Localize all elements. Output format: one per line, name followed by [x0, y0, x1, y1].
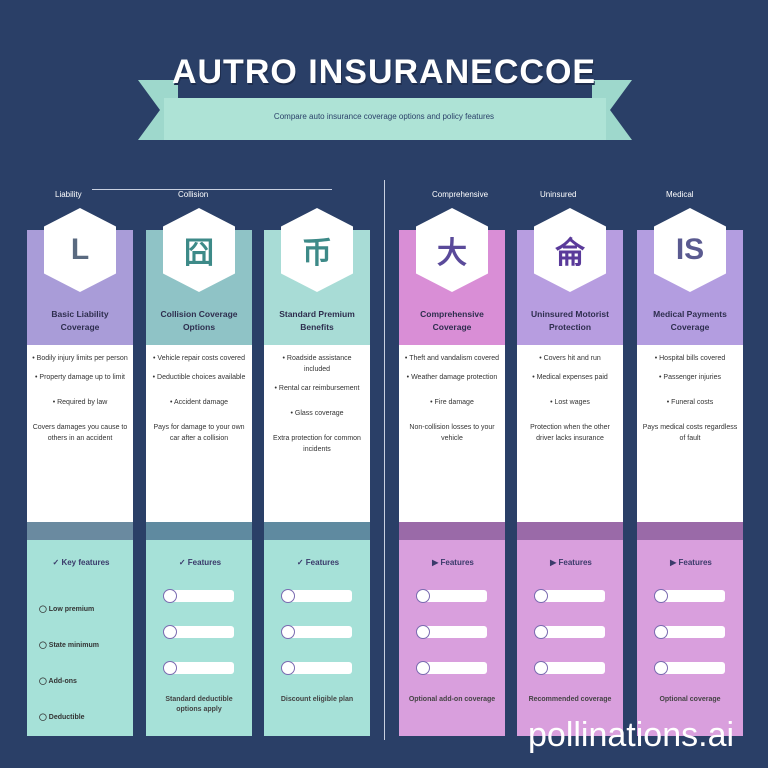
section labels — [55, 189, 694, 199]
section labels: Comprehensive — [432, 190, 488, 199]
section labels: Medical — [666, 190, 694, 199]
column 4: • Theft and vandalism covered — [405, 355, 499, 362]
column 2: • Accident damage — [170, 399, 228, 406]
column 5 — [517, 208, 623, 736]
icon 1 — [44, 208, 116, 292]
column 5: ▶ Features — [550, 558, 592, 567]
column 2: ✓ Features — [179, 558, 221, 567]
icon 4 — [416, 208, 488, 292]
icon 2 — [163, 208, 235, 292]
icon 3: 币 — [302, 237, 332, 270]
column 4: Coverage — [433, 322, 471, 332]
column 1: Basic Liability — [51, 309, 109, 319]
column 4: ▶ Features — [432, 558, 474, 567]
icon 4: 大 — [437, 237, 467, 270]
column 2: • Deductible choices available — [153, 374, 245, 381]
column 1 — [27, 208, 133, 736]
column 4: Comprehensive — [420, 309, 484, 319]
column 5: Protection — [549, 322, 591, 332]
section labels: Uninsured — [540, 190, 576, 199]
column 3: Discount eligible plan — [281, 696, 353, 703]
column 4: Non-collision losses to your vehicle — [409, 424, 495, 442]
column 4: Optional add-on coverage — [409, 696, 495, 703]
column 2: Standard deductible options apply — [165, 696, 233, 713]
title: AUTRO INSURANECCOE — [172, 53, 596, 91]
column 6: Optional coverage — [659, 696, 721, 703]
ribbon banner — [138, 80, 632, 140]
column 1: ✓ Key features — [53, 558, 109, 567]
column 1: Coverage — [61, 322, 99, 332]
column 2: Collision Coverage — [160, 309, 238, 319]
column 1: ◯ Deductible — [39, 714, 85, 721]
icon 5 — [534, 208, 606, 292]
column 5: • Medical expenses paid — [532, 374, 608, 381]
column 6: Coverage — [671, 322, 709, 332]
column 4: • Weather damage protection — [407, 374, 497, 381]
column 4 — [399, 208, 505, 736]
column 1: • Bodily injury limits per person — [32, 355, 128, 362]
column 3: Extra protection for common incidents — [273, 435, 361, 453]
column 6: • Hospital bills covered — [655, 355, 725, 362]
icon 6: IS — [676, 233, 704, 266]
column 5: Protection when the other driver lacks insurance — [530, 424, 610, 442]
column 1: Covers damages you cause to others in an accident — [33, 424, 127, 442]
column 6: ▶ Features — [670, 558, 712, 567]
column 3 — [264, 208, 370, 736]
icon 2: 囧 — [184, 237, 214, 270]
icon 5: 侖 — [555, 237, 585, 270]
column 6: Pays medical costs regardless of fault — [643, 424, 737, 442]
column 5: • Lost wages — [550, 399, 590, 406]
column 3: Benefits — [300, 322, 334, 332]
section labels: Liability — [55, 190, 82, 199]
column 5: Uninsured Motorist — [531, 309, 609, 319]
section labels: Collision — [178, 190, 208, 199]
column 6: • Passenger injuries — [659, 374, 721, 381]
divider — [384, 180, 385, 740]
column 4: • Fire damage — [430, 399, 474, 406]
icon 6 — [654, 208, 726, 292]
column 6: Medical Payments — [653, 309, 727, 319]
column 1: ◯ Low premium — [39, 606, 94, 613]
subtitle: Compare auto insurance coverage options and policy features — [274, 112, 494, 121]
column 1: ◯ Add-ons — [39, 678, 77, 685]
column 3: ✓ Features — [297, 558, 339, 567]
column 1: • Required by law — [53, 399, 107, 406]
column 2: Options — [183, 322, 215, 332]
column 3: Standard Premium — [279, 309, 355, 319]
column 1: ◯ State minimum — [39, 642, 99, 649]
column 5: • Covers hit and run — [539, 355, 601, 362]
column 6: • Funeral costs — [667, 399, 713, 406]
column 1: • Property damage up to limit — [35, 374, 125, 381]
column 2: Pays for damage to your own car after a collision — [153, 424, 245, 442]
watermark: pollinations.ai — [528, 716, 734, 754]
column 2: • Vehicle repair costs covered — [153, 355, 245, 362]
icon 3 — [281, 208, 353, 292]
column 2 — [146, 208, 252, 736]
column 3: • Roadside assistance included — [282, 355, 352, 373]
icon 1: L — [71, 233, 89, 266]
column 3: • Rental car reimbursement — [275, 385, 359, 392]
column 3: • Glass coverage — [290, 410, 344, 417]
column 5: Recommended coverage — [529, 696, 611, 703]
column 6 — [637, 208, 743, 736]
